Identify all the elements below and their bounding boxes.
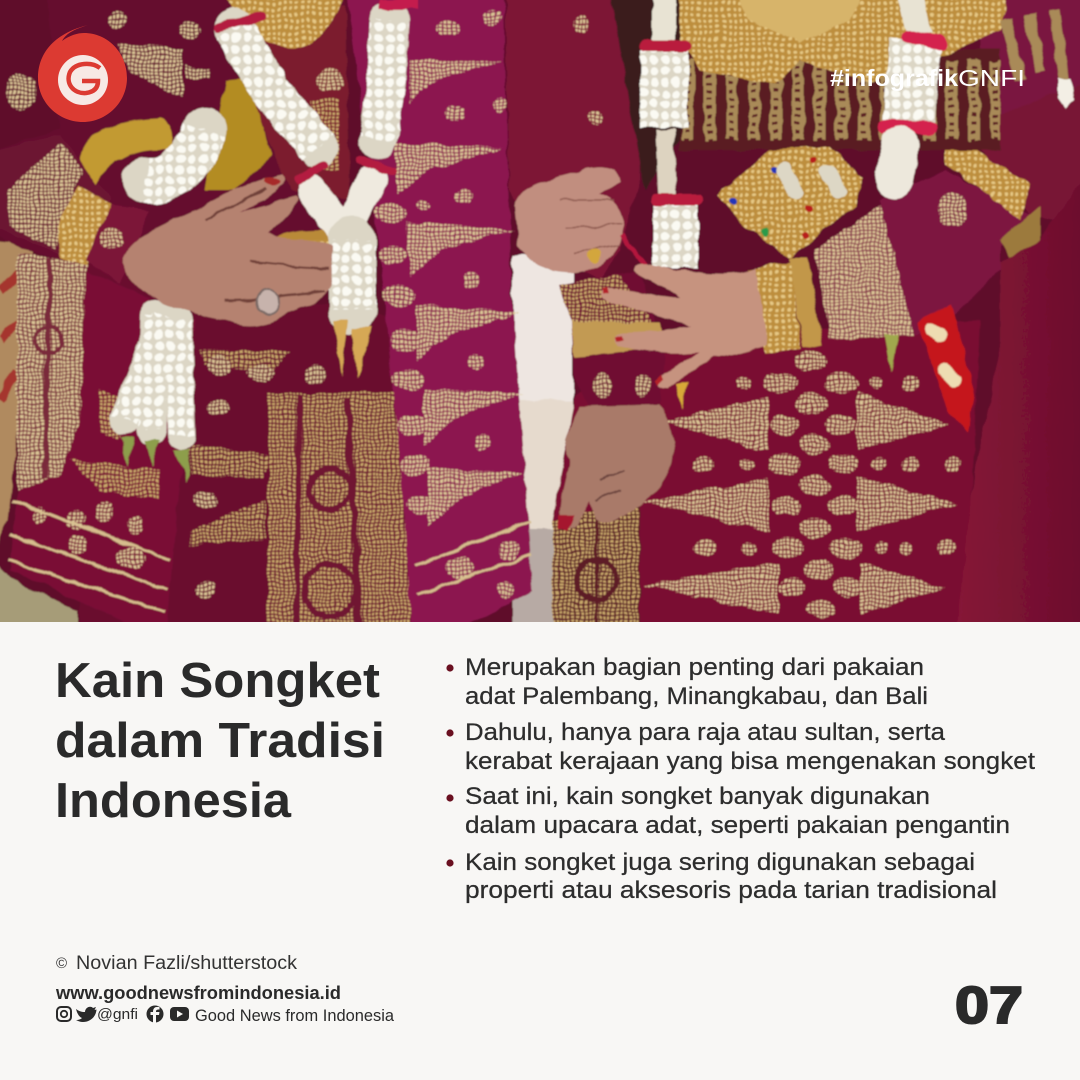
groom upper garment [4,4,351,252]
website url: www.goodnewsfromindonesia.id [55,983,341,1003]
logo: GNFI red speech mark [38,25,127,122]
title: dalam Tradisi [55,714,385,768]
groom hand with ring [122,174,333,326]
bright background gap [513,255,573,630]
channel name: Good News from Indonesia [195,1006,395,1025]
bride gold necklace and fringe [678,0,1074,150]
groom front panel [8,254,195,640]
bullet 1: Merupakan bagian penting dari pakaian [465,654,924,681]
bullet 1: adat Palembang, Minangkabau, dan Bali [465,683,928,710]
bride bracelets [748,258,822,353]
bullet 4: Kain songket juga sering digunakan sebagai [465,849,975,876]
green bud [884,334,899,372]
bride garlands [645,0,940,268]
bullet list [446,654,1035,904]
jasmine garlands, groom [121,4,418,483]
bullet 3 [446,783,1010,839]
kris dagger [80,78,272,190]
bride sleeve [505,0,680,280]
title: Kain Songket [55,654,380,708]
bride right arm and sleeve [815,0,1080,340]
bullet 1 [446,654,928,710]
bride lower hand [602,264,768,408]
social media row [57,1006,395,1025]
title: Indonesia [55,774,292,828]
groom jacket front, magenta [346,0,533,640]
photo credit: Novian Fazli/shutterstock [76,953,298,974]
photo: songket wedding attire [0,0,1080,650]
bride upper hand [514,168,645,274]
blurred foreground figure [955,170,1080,640]
icon: youtube [170,1007,189,1021]
icon: twitter [76,1007,96,1022]
bride belt ornament [717,146,862,258]
groom sleeve cuff, crimson [85,205,150,285]
bride skirt [553,320,980,640]
bullet 3: Saat ini, kain songket banyak digunakan [465,783,930,810]
groom left sleeve with gold weave [0,135,110,255]
photo credit: © [56,955,67,972]
twitter handle: @gnfi [97,1006,138,1023]
hashtag label [830,65,1025,91]
icon: facebook [146,1006,164,1023]
bullet 2: Dahulu, hanya para raja atau sultan, serta [465,719,946,746]
groom lower skirt [80,260,420,640]
page number: 07 [955,977,1023,1035]
hashtag label: GNFI [958,65,1025,91]
title [55,654,385,828]
bullet 3: dalam upacara adat, seperti pakaian pengantin [465,812,1010,839]
hashtag label: #infografik [830,65,958,91]
bride hanging hand [558,405,674,532]
bullet 4 [446,849,997,904]
bride sleeve cuff [558,270,665,408]
icon: instagram [57,1007,71,1021]
gold cuff [57,185,110,265]
red sash [917,305,975,432]
woven mat, lower left [0,240,78,640]
bullet 4: properti atau aksesoris pada tarian tradisional [465,877,997,904]
bullet 2 [446,719,1035,775]
golden brooch, chest and belt [226,0,344,244]
bullet 2: kerabat kerajaan yang bisa mengenakan songket [465,748,1035,775]
